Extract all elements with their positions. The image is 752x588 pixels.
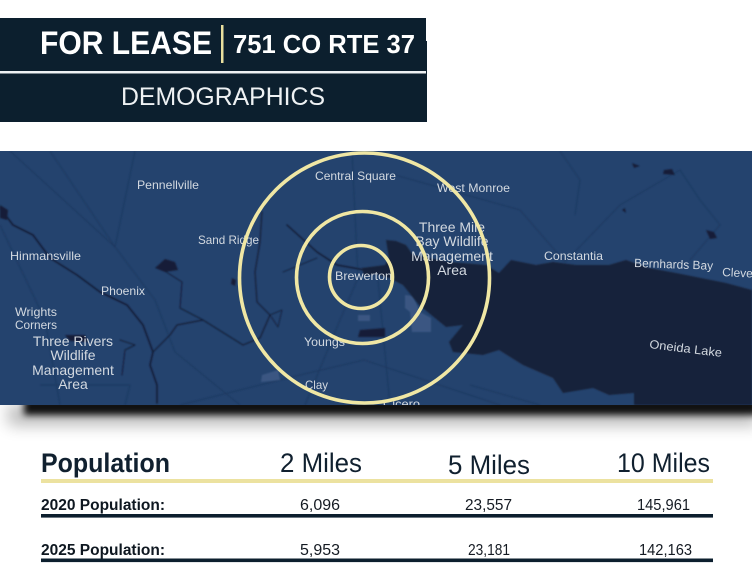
map place labels: Wildlife: [50, 347, 96, 363]
header banner: [0, 18, 427, 122]
table header: 5 Miles: [448, 450, 530, 480]
map place labels: Wrights: [15, 305, 57, 319]
row: 2020 population: [41, 497, 690, 514]
row: 2025 population: 142,163: [639, 542, 692, 559]
map place labels: Corners: [15, 318, 57, 332]
table header: Population: [41, 448, 170, 478]
map place labels: Youngs: [304, 335, 345, 349]
row: 2020 population: 23,557: [465, 497, 512, 514]
map place labels: Three Mile: [419, 219, 485, 235]
table: population: [41, 448, 713, 562]
map place labels: Oneida Lake: [649, 337, 723, 360]
map place labels: Phoenix: [101, 284, 145, 298]
map place labels: Management: [411, 248, 493, 264]
oneida lake: [362, 240, 752, 405]
heading: address: 751 CO RTE 37: [233, 29, 415, 59]
table header: 10 Miles: [617, 448, 710, 478]
row: 2025 population: 5,953: [300, 542, 340, 559]
map place labels: Area: [437, 262, 467, 278]
map place labels: Hinmansville: [10, 249, 81, 263]
ring: 2 miles: [330, 246, 392, 308]
row: 2020 population: 6,096: [300, 497, 340, 514]
map place labels: Clay: [305, 378, 328, 392]
map place labels: Three Rivers: [33, 333, 113, 349]
table header: [41, 448, 710, 480]
ring: 10 miles: [240, 153, 490, 403]
row: 2020 population: 145,961: [637, 497, 690, 514]
map place labels: Central Square: [315, 169, 396, 183]
map place labels: Sand Ridge: [198, 233, 259, 247]
row: 2025 population: 2025 Population:: [41, 542, 165, 559]
map roads and water: [0, 151, 720, 405]
table header: 2 Miles: [280, 448, 362, 478]
map place labels: Area: [58, 376, 88, 392]
subheading: demographics: DEMOGRAPHICS: [121, 83, 325, 111]
map place labels: Pennellville: [137, 178, 199, 192]
radius rings: [240, 153, 490, 403]
map place labels: West Monroe: [437, 181, 510, 195]
ring: 5 miles: [296, 212, 428, 344]
row: 2020 population: 2020 Population:: [41, 497, 165, 514]
map place labels: Constantia: [544, 249, 603, 263]
row: 2025 population: 23,181: [468, 542, 510, 559]
map place labels: Bernhards Bay: [634, 256, 713, 273]
row: 2025 population: [41, 542, 692, 559]
heading: for lease: FOR LEASE: [40, 25, 212, 61]
panel: radius map: [0, 151, 752, 411]
map place labels: Bay Wildlife: [415, 233, 489, 249]
map place labels: Management: [32, 362, 114, 378]
gold divider: [221, 25, 224, 63]
map place labels: Brewerton: [335, 269, 392, 283]
map place labels: [10, 169, 752, 411]
map place labels: Cicero: [383, 397, 420, 411]
map drop shadow: [8, 398, 752, 425]
